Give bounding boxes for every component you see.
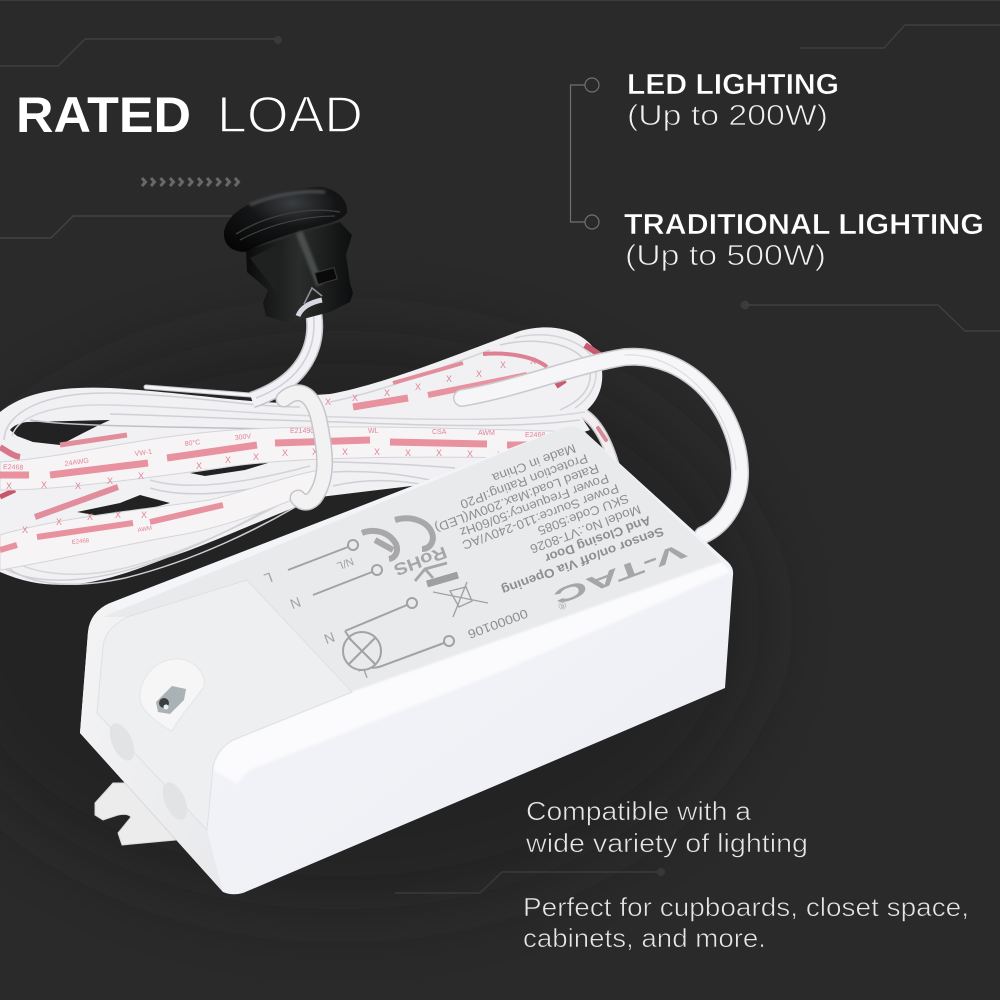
sensor cap [224,187,347,252]
main pink-striped cable: X [107,476,113,486]
gaps between cables [10,420,268,516]
printed product label: 00000106 [466,606,530,641]
main pink-striped cable: X [253,452,259,462]
front bright edge [213,562,730,784]
main pink-striped cable: E2468 [525,432,545,439]
chevron row [142,178,238,186]
white sensor module [80,426,733,894]
right top cable loop: X [325,397,331,407]
V-TAC logo: ® [556,598,567,612]
rated load item: LED lighting: LED LIGHTING [627,69,839,101]
front pink-striped cable: X [115,510,121,520]
cut wire end [146,387,290,398]
wire slot left [105,720,139,764]
description text: cabinets, and more. [523,923,766,953]
main pink-striped cable: 300V [234,433,252,442]
right top cable loop: X [352,393,358,403]
right top cable loop: X [446,374,452,384]
wiring labels: N [322,629,337,647]
front pink-striped cable [0,470,325,570]
main pink-striped cable: X [75,481,81,491]
title [16,86,363,143]
main pink-striped cable: AWM [478,430,495,437]
main pink-striped cable: E2468 [3,464,24,472]
cover plate [97,580,352,830]
front pink-striped cable: X [56,517,62,527]
main pink-striped cable: X [467,449,473,459]
printed product label: SKU Code:5085 [536,491,631,538]
main pink-striped cable: 80°C [184,438,201,448]
sensor lead wire [252,305,315,400]
right top cable loop: X [384,388,390,398]
main pink-striped cable: X [436,448,442,458]
description text: wide variety of lighting [525,828,808,858]
cable tie [284,393,325,502]
lower plain cable grooves [0,462,455,584]
top face [97,426,722,830]
rated load item: traditional lighting: (Up to 500W) [625,240,826,272]
printed product label: Model No.:VT-8026 [528,502,643,556]
wiring labels: L [357,665,370,683]
top plain cable grooves [4,393,585,440]
printed product label [433,441,666,641]
main pink-striped cable: X [196,461,202,471]
front pink-striped cable: X [87,512,93,522]
main pink-striped cable: X [138,471,144,481]
printed product label: Power Source:110-240V/AC [460,481,621,552]
right top cable loop: X [476,369,482,379]
screw [156,686,186,714]
main pink-striped cable: X [374,447,380,457]
front pink-striped cable: AWM [137,526,153,534]
main pink-striped cable: E214900 [290,428,318,435]
description text: Compatible with a [526,796,752,826]
main pink-striped cable: CSA [432,429,447,436]
main pink-striped cable: X [342,447,348,457]
front pink-striped cable: X [141,510,147,520]
main pink-striped cable: X [6,481,12,491]
printed product label: Protection Rating:IP20 [458,451,590,511]
main pink-striped cable: X [225,455,231,465]
right top cable loop: X [500,360,506,370]
printed product label: And Closing Door [543,513,653,565]
screw recess [140,659,204,731]
main pink-striped cable: X [41,480,47,490]
rated load item: traditional lighting: TRADITIONAL LIGHTING [624,209,984,241]
V-TAC logo: V-TAC [550,538,689,608]
description text [523,796,969,953]
sensor body [246,222,353,323]
main pink-striped cable [0,427,580,491]
module side and base [80,426,733,894]
main pink-striped cable: X [282,448,288,458]
title: RATED [16,87,191,143]
front pink-striped cable: E2468 [72,538,90,546]
mounting tab [95,783,176,845]
main pink-striped cable: VW-1 [134,449,153,458]
description text: Perfect for cupboards, closet space, [523,892,969,922]
wiring labels [262,554,370,683]
wiring labels: N [288,594,303,612]
right top cable loop: X [530,356,536,366]
right top cable loop: X [415,382,421,392]
printed product label: Made in China [490,441,578,485]
rated load item: LED lighting [627,69,839,132]
rear pink-striped cable [0,435,127,517]
certification marks [362,518,488,617]
printed product label: Power Frequency:50/60Hz [458,471,611,539]
title: LOAD [217,86,363,143]
right top cable loop [325,335,600,410]
wiring diagram [288,540,454,670]
main pink-striped cable: WL [368,428,379,435]
main pink-striped cable: X [405,448,411,458]
large white return wire [462,355,740,535]
rated load item: LED lighting: (Up to 200W) [627,100,828,132]
cable bundle silhouette [0,327,602,585]
main pink-striped cable: X [312,447,318,457]
rated load item: traditional lighting [624,209,984,272]
V-TAC logo [550,538,689,612]
wiring labels: N/L [335,554,355,572]
wire slot right [158,779,192,823]
sensor highlights [236,192,340,316]
main pink-striped cable: X [497,450,503,460]
cable bundle [0,305,740,585]
device shadow [0,330,760,910]
wiring labels: L [262,569,275,587]
connector bracket with nodes [570,78,599,229]
certification marks: RoHS [391,542,449,579]
black door sensor [224,187,353,323]
end cap face [80,603,223,892]
back wire behind the box [570,408,616,472]
printed product label: Sensor on/off Via Opening [500,524,666,597]
front pink-striped cable: X [22,525,28,535]
main pink-striped cable: 24AWG [64,458,89,468]
printed product label: Rated Load:Max.200W(LED) [433,461,601,535]
